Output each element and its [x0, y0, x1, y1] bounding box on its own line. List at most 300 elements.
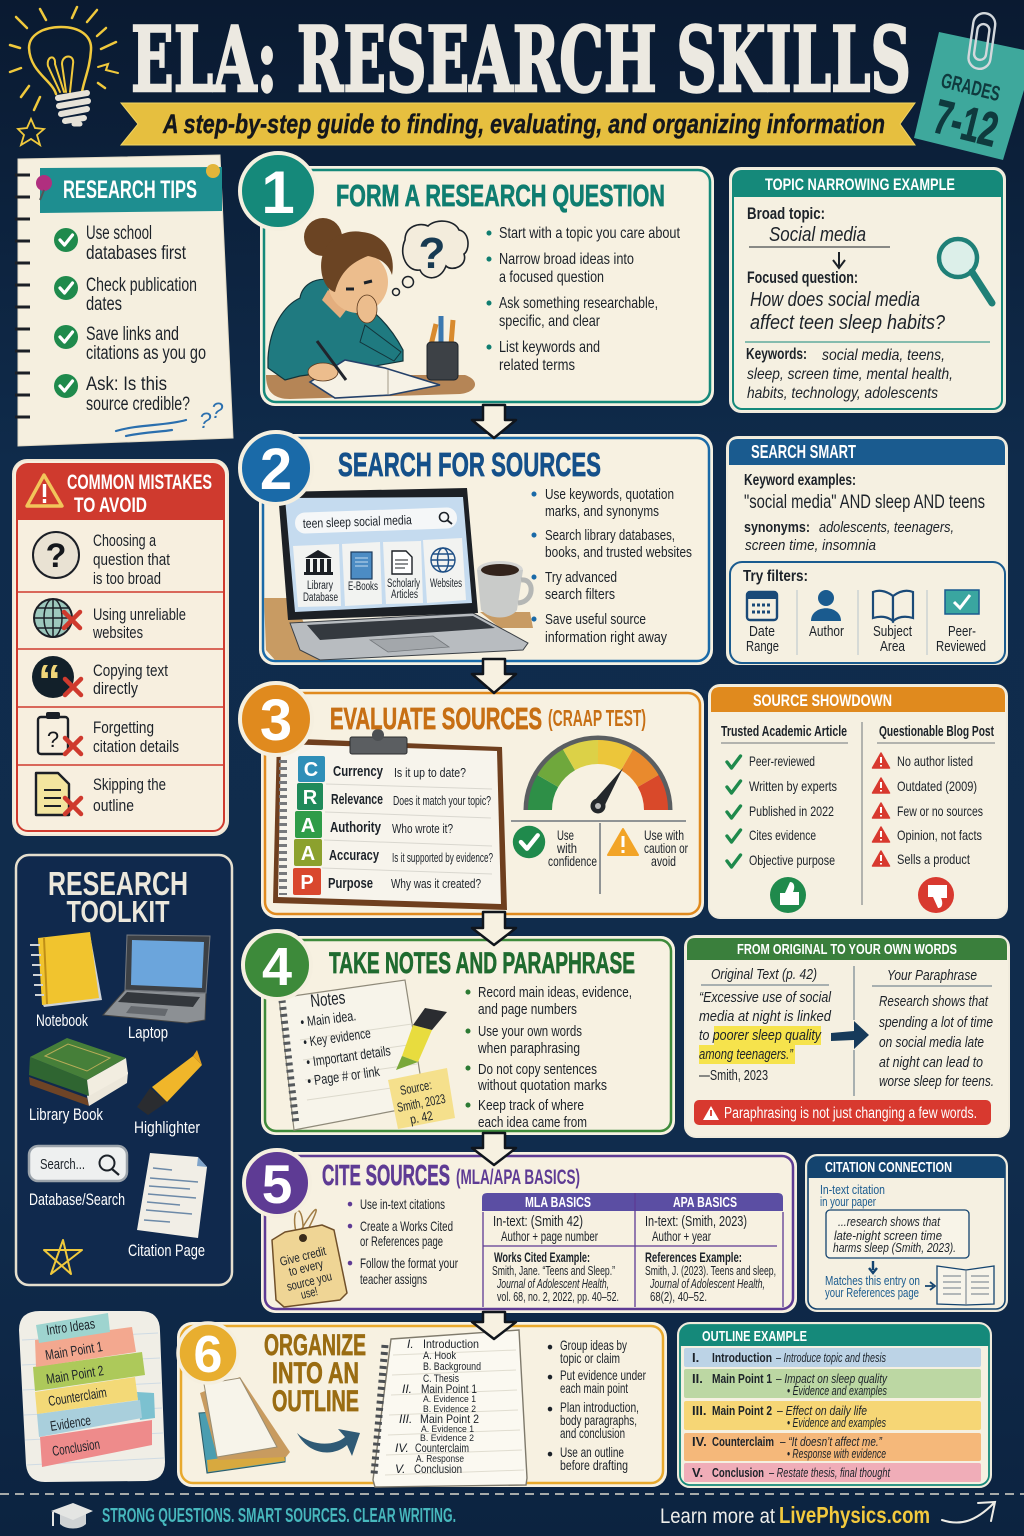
filters box: Peer-: [948, 624, 976, 640]
citation heading: CITATION CONNECTION: [825, 1159, 952, 1176]
tab: counterclaim: Counterclaim: [47, 1384, 108, 1409]
toolkit heading: TOOLKIT: [66, 894, 170, 929]
row: conclusion: Conclusion: [712, 1465, 764, 1480]
number badge 5: 5: [262, 1153, 292, 1215]
row: main point 1: [684, 1369, 981, 1398]
filters box: Subject: [873, 624, 912, 640]
column: trusted academic article: Objective purpose: [749, 852, 835, 868]
tab: main point 2: [33, 1352, 145, 1391]
icon: notebook: [30, 932, 102, 1007]
outline example heading: [680, 1325, 989, 1346]
toolkit heading: [48, 865, 188, 929]
row: purpose: [293, 868, 481, 895]
row: main point 1: – Impact on sleep quality: [775, 1372, 888, 1386]
keyword examples: screen time, insomnia: [745, 537, 876, 554]
in-text citation label: in your paper: [820, 1194, 876, 1209]
step 4 heading: TAKE NOTES AND PARAPHRASE: [329, 947, 635, 980]
mistake: too broad: question that: [93, 550, 170, 569]
panel: source showdown: [709, 685, 1007, 918]
icon: marker: [396, 1008, 447, 1070]
row: authority: Authority: [330, 819, 381, 836]
row: counterclaim: [684, 1433, 981, 1461]
keywords: social media, teens,: [822, 347, 945, 364]
verdict: use with confidence: confidence: [548, 853, 597, 869]
row: accuracy: Accuracy: [329, 847, 379, 864]
original text: media at night is linked: [699, 1008, 832, 1025]
original text: —Smith, 2023: [699, 1067, 768, 1084]
row: currency: [298, 756, 466, 782]
number badge 1: 1: [261, 159, 295, 226]
panel: search smart: [727, 437, 1007, 664]
label: notebook: Notebook: [36, 1011, 88, 1030]
row: introduction: I.: [692, 1350, 699, 1365]
panel: from original to your own words: [685, 936, 1009, 1137]
row: introduction: [684, 1348, 981, 1367]
focused question: Focused question:: [747, 268, 858, 287]
panel: step 3: [240, 683, 704, 918]
icon: open references book: [937, 1266, 994, 1305]
illustration: laptop with library search: E-Books: [348, 581, 378, 593]
column: APA: Journal of Adolescent Health,: [649, 1276, 765, 1291]
step 5 bullets: Follow the format your: [360, 1255, 458, 1271]
focused question: How does social media: [750, 289, 920, 311]
tab: evidence: Evidence: [49, 1412, 92, 1434]
step 4 bullets: when paraphrasing: [477, 1040, 580, 1057]
step 5 bullets: [350, 1196, 458, 1287]
step 6 bullets: before drafting: [560, 1457, 628, 1473]
icon: library books: [29, 1038, 128, 1106]
illustration: laptop with library search: Library: [307, 580, 333, 592]
step 5 heading: CITE SOURCES: [322, 1160, 450, 1192]
step 6 bullets: [550, 1337, 646, 1473]
outline notebook: Introduction: [423, 1337, 479, 1351]
icon: laptop: [103, 935, 210, 1023]
verdict: use with caution: caution or: [644, 840, 688, 856]
outline notebook: II.: [402, 1382, 412, 1396]
panel: step 4: [243, 931, 675, 1135]
column: APA: In-text: (Smith, 2023): [645, 1213, 747, 1230]
step 2 bullets: Use keywords, quotation: [545, 486, 674, 503]
step 4 bullets: Keep track of where: [478, 1097, 584, 1114]
verdict: use with caution: Use with: [644, 827, 684, 843]
row: main point 2: [684, 1401, 981, 1430]
step 4 bullets: Record main ideas, evidence,: [478, 984, 632, 1001]
arrow: to book: [925, 1282, 935, 1290]
icon: author person: [811, 590, 841, 621]
icon: thought bubble: ?: [419, 229, 445, 278]
arrow: step 3 to 4: [472, 912, 516, 945]
icon: scholarly document: [392, 551, 412, 574]
row: main point 2: III.: [692, 1403, 706, 1418]
mistake: skipping outline: outline: [93, 796, 134, 815]
footer link: LivePhysics.com: [779, 1502, 930, 1528]
column: MLA: [492, 1194, 619, 1304]
footer link: [660, 1502, 930, 1528]
warning bar: [694, 1100, 991, 1125]
mistake: too broad: is too broad: [93, 569, 161, 588]
toolkit heading: RESEARCH: [48, 865, 188, 902]
row: counterclaim: • Response with evidence: [787, 1447, 886, 1461]
outline notebook: Conclusion: [414, 1462, 462, 1476]
outline notebook: Counterclaim: [415, 1441, 469, 1455]
broad topic: Social media: [769, 224, 866, 246]
row: purpose: P: [300, 872, 314, 894]
icon: thumbs up: [770, 877, 806, 913]
panel: step 2: [240, 432, 713, 665]
step 2 bullets: books, and trusted websites: [545, 544, 692, 561]
in-text citation label: [820, 1182, 885, 1209]
tip: databases: databases first: [86, 243, 187, 264]
step 6 bullets: Put evidence under: [560, 1367, 646, 1383]
header: [10, 7, 1024, 160]
row: currency: Is it up to date?: [394, 765, 466, 780]
search smart heading: [729, 439, 1005, 465]
panel: research tips: [15, 155, 233, 446]
column: questionable blog post: [872, 723, 994, 867]
row: currency: Currency: [333, 763, 383, 780]
step 2 bullets: [534, 486, 692, 646]
focused question: affect teen sleep habits?: [750, 312, 946, 334]
column: questionable blog post: No author listed: [897, 753, 973, 769]
panel: step 6: [177, 1322, 667, 1487]
icon: spiral binding: [15, 175, 30, 417]
panel: outline tabs: [19, 1311, 165, 1482]
keywords: [746, 346, 953, 402]
scribble with question marks: ?: [199, 408, 212, 433]
icon: library columns: [304, 550, 333, 575]
step 4 bullets: without quotation marks: [477, 1077, 607, 1094]
illustration: notes notebook: • Important details: [305, 1042, 392, 1070]
step 6 heading: ORGANIZE: [264, 1329, 366, 1362]
filters box: Date: [749, 624, 775, 640]
outline notebook: [373, 1330, 527, 1487]
outline notebook: C. Thesis: [423, 1373, 459, 1385]
row: accuracy: A: [301, 843, 315, 865]
row: conclusion: – Restate thesis, final thought: [768, 1466, 890, 1480]
mistake: copying text: “: [38, 655, 61, 707]
step 4 bullets: each idea came from: [478, 1114, 587, 1131]
arrow: down to references: [869, 1261, 877, 1273]
row: counterclaim: – “It doesn’t affect me.”: [779, 1435, 883, 1449]
tip: citations: Save links and: [86, 324, 179, 345]
column: APA: [645, 1194, 776, 1304]
step 6 heading: OUTLINE: [272, 1385, 359, 1418]
your paraphrase: worse sleep for teens.: [879, 1073, 994, 1090]
step 5 bullets: Use in-text citations: [360, 1196, 445, 1212]
your paraphrase: Your Paraphrase: [887, 967, 977, 984]
icon: thumbs down: [918, 877, 954, 913]
row: accuracy: [294, 839, 493, 866]
outline notebook: B. Background: [423, 1361, 481, 1373]
column: MLA: Works Cited Example:: [494, 1249, 590, 1265]
row: relevance: Relevance: [331, 791, 383, 808]
column: trusted academic article: Written by experts: [749, 778, 837, 794]
original text: Original Text (p. 42): [711, 966, 817, 983]
illustration: laptop with library search: Scholarly: [387, 578, 420, 590]
outline notebook: I.: [407, 1337, 414, 1351]
icon: light bulb: [10, 7, 118, 145]
icon: globe: [431, 548, 455, 572]
step 5 bullets: Create a Works Cited: [360, 1218, 453, 1234]
step 6 bullets: each main point: [560, 1380, 628, 1396]
paraphrase heading: FROM ORIGINAL TO YOUR OWN WORDS: [737, 941, 957, 958]
illustration: laptop with library search: Articles: [391, 589, 418, 601]
tab: main point 1: [35, 1327, 136, 1367]
mistake: citation details: [38, 712, 179, 756]
step 4 bullets: and page numbers: [478, 1001, 577, 1018]
footer slogan: STRONG QUESTIONS. SMART SOURCES. CLEAR WRITING.: [102, 1505, 456, 1527]
label: database search: Database/Search: [29, 1190, 125, 1209]
original text: among teenagers.”: [699, 1046, 794, 1063]
mistake: too broad: ?: [46, 537, 66, 575]
step 6 heading: [264, 1329, 366, 1418]
icon: subject open book: [873, 591, 913, 621]
row: authority: Who wrote it?: [392, 821, 453, 836]
icon: push pin: [36, 175, 52, 200]
verdict: use with confidence: Use: [557, 827, 574, 843]
search smart heading: SEARCH SMART: [751, 442, 856, 462]
your paraphrase: at night can lead to: [879, 1054, 983, 1071]
mistake: copying text: directly: [93, 679, 138, 698]
citation sample box: harms sleep (Smith, 2023).: [833, 1240, 956, 1255]
tip: dates: [54, 275, 197, 315]
filters box: Range: [746, 639, 779, 655]
illustration: laptop with library search: Websites: [430, 578, 462, 590]
mistake: citation details: citation details: [93, 737, 179, 756]
outline notebook: V.: [395, 1462, 405, 1476]
illustration: laptop with library search: teen sleep social media: [303, 512, 413, 531]
row: main point 1: • Evidence and examples: [787, 1384, 887, 1398]
filters box: Try filters:: [743, 568, 808, 585]
number badge 2: [240, 432, 312, 504]
filters box: [730, 562, 1005, 663]
outline notebook: A. Response: [416, 1453, 464, 1465]
footer link: Learn more at: [660, 1505, 775, 1528]
verdict: use with caution: [608, 827, 688, 869]
showdown heading: [711, 687, 1005, 712]
illustration: notes notebook: • Main idea.: [299, 1007, 357, 1030]
original text: [699, 966, 832, 1084]
outline notebook: IV.: [395, 1441, 409, 1455]
tab: conclusion: Conclusion: [51, 1436, 101, 1459]
icon: citation page: [137, 1153, 207, 1238]
citation sample box: [826, 1210, 969, 1258]
outline notebook: Main Point 1: [421, 1382, 477, 1396]
your paraphrase: spending a lot of time: [879, 1014, 993, 1031]
tip: databases: Use school: [86, 223, 152, 244]
illustration: paper stack: [199, 1377, 290, 1473]
icon: credit tag: Give credit: [278, 1244, 328, 1269]
column: MLA: In-text: (Smith 42): [493, 1213, 583, 1230]
number badge 3: 3: [260, 688, 292, 753]
tab: conclusion: [40, 1420, 152, 1467]
step 1 bullets: List keywords and: [499, 339, 600, 356]
row: authority: [295, 811, 453, 838]
column: questionable blog post: Few or no sources: [897, 803, 983, 819]
mistake: too broad: [33, 531, 170, 588]
number badge 5: [244, 1150, 310, 1216]
mistake: unreliable websites: websites: [92, 623, 143, 642]
citation sample box: late-night screen time: [834, 1228, 942, 1243]
mistakes heading: TO AVOID: [74, 494, 147, 517]
tips heading: [40, 167, 222, 213]
icon: credit tag: source you: [285, 1269, 333, 1294]
step 2 bullets: Try advanced: [545, 569, 617, 586]
outline notebook: B. Evidence 2: [420, 1433, 474, 1444]
step 6 bullets: Plan introduction,: [560, 1399, 639, 1415]
row: conclusion: V.: [692, 1465, 703, 1480]
step 3 heading: EVALUATE SOURCES: [330, 701, 542, 736]
tip: dates: dates: [86, 294, 122, 315]
filters box: Area: [880, 639, 906, 655]
column: MLA: MLA BASICS: [525, 1194, 591, 1211]
references match label: your References page: [825, 1285, 919, 1300]
row: introduction: – Introduce topic and thesis: [775, 1351, 886, 1365]
step 3 heading: (CRAAP TEST): [548, 705, 646, 731]
column: APA: References Example:: [645, 1249, 742, 1265]
tip: credibility: [54, 374, 190, 415]
step 6 bullets: body paragraphs,: [560, 1412, 637, 1428]
arrow: step 5 to 6: [472, 1312, 516, 1339]
step 4 bullets: Use your own words: [478, 1023, 582, 1040]
outline notebook: A. Evidence 1: [423, 1394, 476, 1405]
references match label: [825, 1273, 920, 1300]
your paraphrase: on social media late: [879, 1034, 984, 1051]
step 5 bullets: or References page: [360, 1233, 443, 1249]
row: conclusion: [684, 1463, 981, 1482]
subtitle ribbon: [121, 103, 915, 145]
number badge 2: 2: [260, 437, 292, 502]
step 2 bullets: information right away: [545, 629, 667, 646]
illustration: notes notebook: • Key evidence: [302, 1025, 372, 1050]
column: trusted academic article: Published in 2022: [749, 803, 834, 819]
column: MLA: Smith, Jane. “Teens and Sleep.”: [492, 1263, 615, 1278]
arrow: footer: [942, 1502, 995, 1523]
panel: step 1: [240, 153, 714, 406]
tab: evidence: [37, 1392, 155, 1437]
keyword examples: adolescents, teenagers,: [819, 519, 954, 536]
paraphrase heading: [687, 938, 1007, 960]
step 2 bullets: marks, and synonyms: [545, 503, 659, 520]
column: trusted academic article: Trusted Academic Article: [721, 723, 847, 740]
row: main point 2: • Evidence and examples: [787, 1416, 886, 1430]
tip: dates: Check publication: [86, 275, 197, 296]
mistake: citation details: ?: [47, 727, 59, 752]
row: relevance: R: [303, 787, 318, 809]
keyword examples: [744, 472, 985, 554]
outline example heading: OUTLINE EXAMPLE: [702, 1328, 807, 1345]
tab: main point 1: Main Point 1: [44, 1338, 104, 1363]
mistake: too broad: Choosing a: [93, 531, 156, 550]
outline notebook: B. Evidence 2: [423, 1404, 476, 1415]
step 2 bullets: search filters: [545, 586, 615, 603]
citation sample box: ...research shows that: [838, 1214, 941, 1229]
gauge: [526, 738, 670, 814]
row: counterclaim: Counterclaim: [712, 1434, 774, 1449]
row: main point 1: Main Point 1: [712, 1371, 772, 1386]
step 1 bullets: Start with a topic you care about: [499, 225, 680, 242]
filters box: Reviewed: [936, 639, 986, 655]
panel: citation connection: [806, 1155, 1007, 1311]
grades note: [914, 12, 1024, 160]
number badge 6: 6: [194, 1326, 222, 1384]
mistake: citation details: Forgetting: [93, 718, 154, 737]
focused question: [747, 268, 946, 334]
arrow: step 2 to 3: [472, 659, 516, 693]
step 1 bullets: a focused question: [499, 269, 604, 286]
column: trusted academic article: Peer-reviewed: [749, 753, 815, 769]
step 6 bullets: and conclusion: [560, 1425, 625, 1441]
row: purpose: Why was it created?: [391, 876, 481, 891]
number badge 6: [178, 1323, 238, 1384]
tip: credibility: source credible?: [86, 394, 190, 415]
number badge 1: [240, 153, 316, 229]
mistakes heading: COMMON MISTAKES: [67, 471, 212, 494]
mistake: skipping outline: [36, 773, 166, 815]
panel: outline example: [678, 1323, 991, 1487]
column: trusted academic article: [721, 723, 847, 868]
verdict: use with confidence: [513, 826, 597, 869]
tab: main point 2: Main Point 2: [45, 1362, 105, 1387]
illustration: notes notebook: • Page # or link: [306, 1063, 381, 1089]
step 2 heading: SEARCH FOR SOURCES: [338, 446, 601, 483]
step 5 bullets: teacher assigns: [360, 1271, 427, 1287]
sticky note: source: p. 42: [409, 1108, 434, 1127]
number badge 4: 4: [262, 937, 292, 997]
your paraphrase: [872, 967, 994, 1090]
footer: [51, 1502, 995, 1528]
original text: “Excessive use of social: [699, 989, 832, 1006]
row: authority: A: [301, 815, 315, 837]
column: APA: Smith, J. (2023). Teens and sleep,: [645, 1263, 776, 1278]
arrow: original to paraphrase: [831, 1021, 869, 1049]
label: citation page: Citation Page: [128, 1241, 205, 1260]
verdict: use with caution: avoid: [651, 853, 676, 869]
column: questionable blog post: Sells a product: [897, 851, 970, 867]
mistake: skipping outline: Skipping the: [93, 775, 166, 794]
illustration: laptop with library search: Database: [303, 592, 338, 604]
column: questionable blog post: Outdated (2009): [897, 778, 977, 794]
mistake: copying text: Copying text: [93, 661, 168, 680]
step 6 bullets: Group ideas by: [560, 1337, 627, 1353]
topic narrowing heading: TOPIC NARROWING EXAMPLE: [765, 175, 955, 194]
column: APA: Author + year: [652, 1228, 711, 1244]
your paraphrase: Research shows that: [879, 993, 989, 1010]
step 1 heading: FORM A RESEARCH QUESTION: [336, 178, 665, 213]
mistake: unreliable websites: [34, 599, 186, 642]
step 4 bullets: Do not copy sentences: [478, 1061, 597, 1078]
row: purpose: Purpose: [328, 875, 373, 892]
step 1 bullets: specific, and clear: [499, 313, 601, 330]
step 6 bullets: Use an outline: [560, 1444, 624, 1460]
step 2 bullets: Search library databases,: [545, 527, 675, 544]
scribble with question marks: ?: [211, 398, 224, 423]
row: counterclaim: IV.: [692, 1434, 707, 1449]
row: relevance: [297, 783, 491, 810]
icon: credit tag: [272, 1209, 347, 1307]
panel: topic narrowing example: [730, 168, 1005, 412]
step 1 bullets: Ask something researchable,: [499, 295, 658, 312]
panel: step 5: [244, 1150, 797, 1313]
table: MLA and APA: [482, 1193, 783, 1307]
illustration: student at desk: [266, 218, 475, 399]
column: MLA: Author + page number: [501, 1228, 598, 1244]
illustration: laptop with library search: [264, 488, 533, 660]
original text: to poorer sleep quality: [699, 1027, 822, 1044]
icon: star: [44, 1240, 82, 1274]
row: relevance: Does it match your topic?: [393, 793, 491, 808]
tab: intro ideas: Intro Ideas: [45, 1315, 96, 1338]
